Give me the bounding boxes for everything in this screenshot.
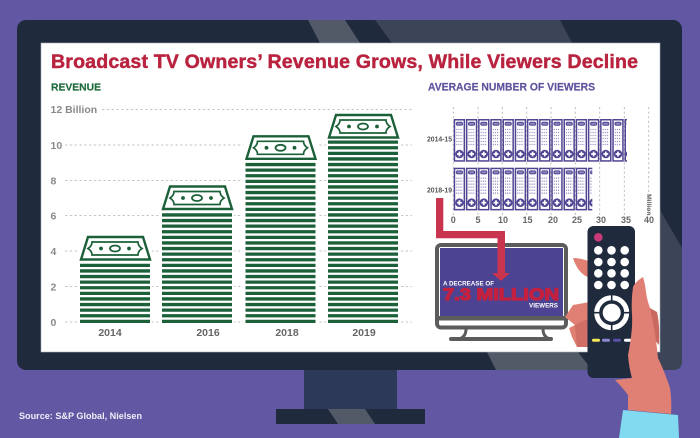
shirt cuff — [619, 410, 679, 438]
x axis labels: 2019 — [352, 327, 376, 339]
callout: a decrease of 7.3 million viewers: VIEWERS — [529, 302, 558, 309]
title: Broadcast TV Owners’ Revenue Grows, While Viewers Decline — [51, 51, 638, 73]
hand: fingers behind remote — [565, 258, 590, 347]
y axis labels: 4 — [50, 246, 56, 258]
arrow: decline from chart to television — [436, 198, 510, 281]
y axis labels: 8 — [50, 176, 56, 188]
heading: revenue: REVENUE — [51, 82, 101, 94]
row labels — [427, 135, 452, 195]
y axis labels: 2 — [50, 282, 56, 294]
remote control — [588, 226, 635, 378]
x axis values — [451, 215, 654, 225]
directional pad — [592, 294, 631, 332]
x axis values: 35 — [621, 215, 631, 225]
power button — [594, 233, 603, 242]
row: 2014-15 — [454, 120, 635, 161]
y axis labels: 6 — [50, 210, 56, 222]
x axis values: 40 — [644, 215, 654, 225]
heading: average number of viewers: AVERAGE NUMBER OF VIEWERS — [428, 81, 595, 93]
x axis labels: 2016 — [196, 327, 220, 339]
callout: a decrease of 7.3 million viewers: 7.3 MILLION — [443, 285, 559, 304]
y axis labels: 12 Billion — [50, 104, 97, 116]
revenue chart — [50, 104, 412, 339]
television — [436, 245, 567, 341]
monitor stand — [276, 350, 425, 424]
y axis labels: 0 — [50, 317, 56, 329]
unit label: million: Million — [645, 194, 652, 216]
bar: 2014 — [78, 234, 152, 324]
x axis labels: 2018 — [275, 327, 299, 339]
bar: 2019 — [326, 112, 400, 324]
x axis labels — [98, 327, 376, 339]
monitor frame — [17, 20, 682, 370]
x axis values: 0 — [451, 215, 456, 225]
y axis labels — [50, 104, 97, 329]
x axis labels: 2014 — [98, 327, 122, 339]
row labels: 2018-19 — [427, 186, 452, 195]
screen panel — [41, 43, 660, 352]
number buttons — [594, 246, 629, 289]
row: 2018-19 — [454, 168, 599, 210]
y axis labels: 10 — [50, 140, 62, 152]
x axis values: 5 — [475, 215, 481, 225]
x axis values: 25 — [572, 215, 582, 225]
hand: palm and thumb — [615, 277, 671, 414]
row labels: 2014-15 — [427, 135, 452, 144]
bar: 2016 — [160, 183, 234, 324]
x axis values: 15 — [522, 215, 533, 225]
bar: 2018 — [243, 133, 318, 324]
x axis values: 30 — [596, 215, 606, 225]
source note: Source: S&P Global, Nielsen — [19, 411, 142, 421]
callout: a decrease of 7.3 million viewers — [443, 281, 559, 309]
viewers chart — [427, 107, 654, 225]
x axis values: 10 — [498, 215, 508, 225]
colour buttons — [592, 339, 632, 342]
callout: a decrease of 7.3 million viewers: A DECREASE OF — [443, 281, 494, 288]
x axis values: 20 — [548, 215, 558, 225]
